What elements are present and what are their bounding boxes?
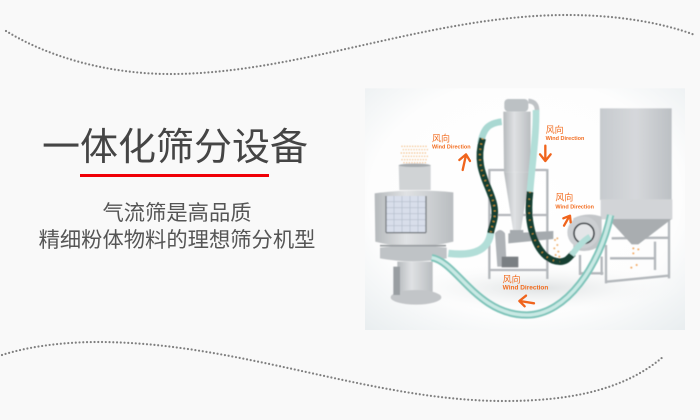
powder stream — [553, 237, 560, 258]
wind label 4: Wind Direction — [503, 285, 548, 292]
wind label 4 — [503, 273, 548, 292]
hose: return line — [432, 215, 611, 315]
bin body — [600, 108, 672, 200]
image background — [365, 88, 685, 330]
cyclone stand — [489, 169, 547, 279]
falling powder — [630, 247, 639, 269]
wind label 3: Wind Direction — [555, 204, 595, 210]
bin stand — [580, 218, 669, 283]
bin collar — [601, 199, 672, 219]
main housing — [375, 191, 453, 247]
hose: cyclone inlet — [448, 122, 502, 254]
wind label 1: 风向 — [432, 132, 450, 143]
fan — [567, 215, 602, 255]
wind label 3 — [555, 192, 595, 210]
wind label 3: 风向 — [555, 192, 573, 203]
bin hopper — [608, 219, 672, 244]
powder above chimney — [401, 146, 429, 163]
fan motor under cyclone — [495, 230, 553, 267]
subtitle text: 精细粉体物料的理想筛分机型 — [39, 228, 315, 252]
wind label 1: Wind Direction — [432, 144, 471, 150]
pedestal — [397, 262, 433, 293]
arrows — [459, 146, 571, 306]
red underline — [80, 174, 269, 177]
ground shadow — [393, 263, 687, 313]
screen cage — [386, 196, 426, 233]
cyclone — [503, 99, 537, 240]
top chimney — [399, 165, 431, 190]
wind label 4: 风向 — [503, 273, 521, 284]
title: 一体化筛分设备 — [42, 127, 308, 169]
wind label 2 — [546, 124, 585, 142]
hose: cyclone outlet to fan — [529, 110, 573, 262]
air classifier — [375, 146, 453, 305]
dust bin filter — [580, 108, 672, 283]
wind label 1 — [432, 132, 471, 150]
subtitle text — [39, 201, 315, 252]
wind label 2: 风向 — [546, 124, 564, 135]
horizontal duct — [508, 231, 553, 243]
lower flange — [380, 245, 447, 261]
wind label 2: Wind Direction — [546, 136, 585, 142]
subtitle text: 气流筛是高品质 — [102, 201, 252, 225]
